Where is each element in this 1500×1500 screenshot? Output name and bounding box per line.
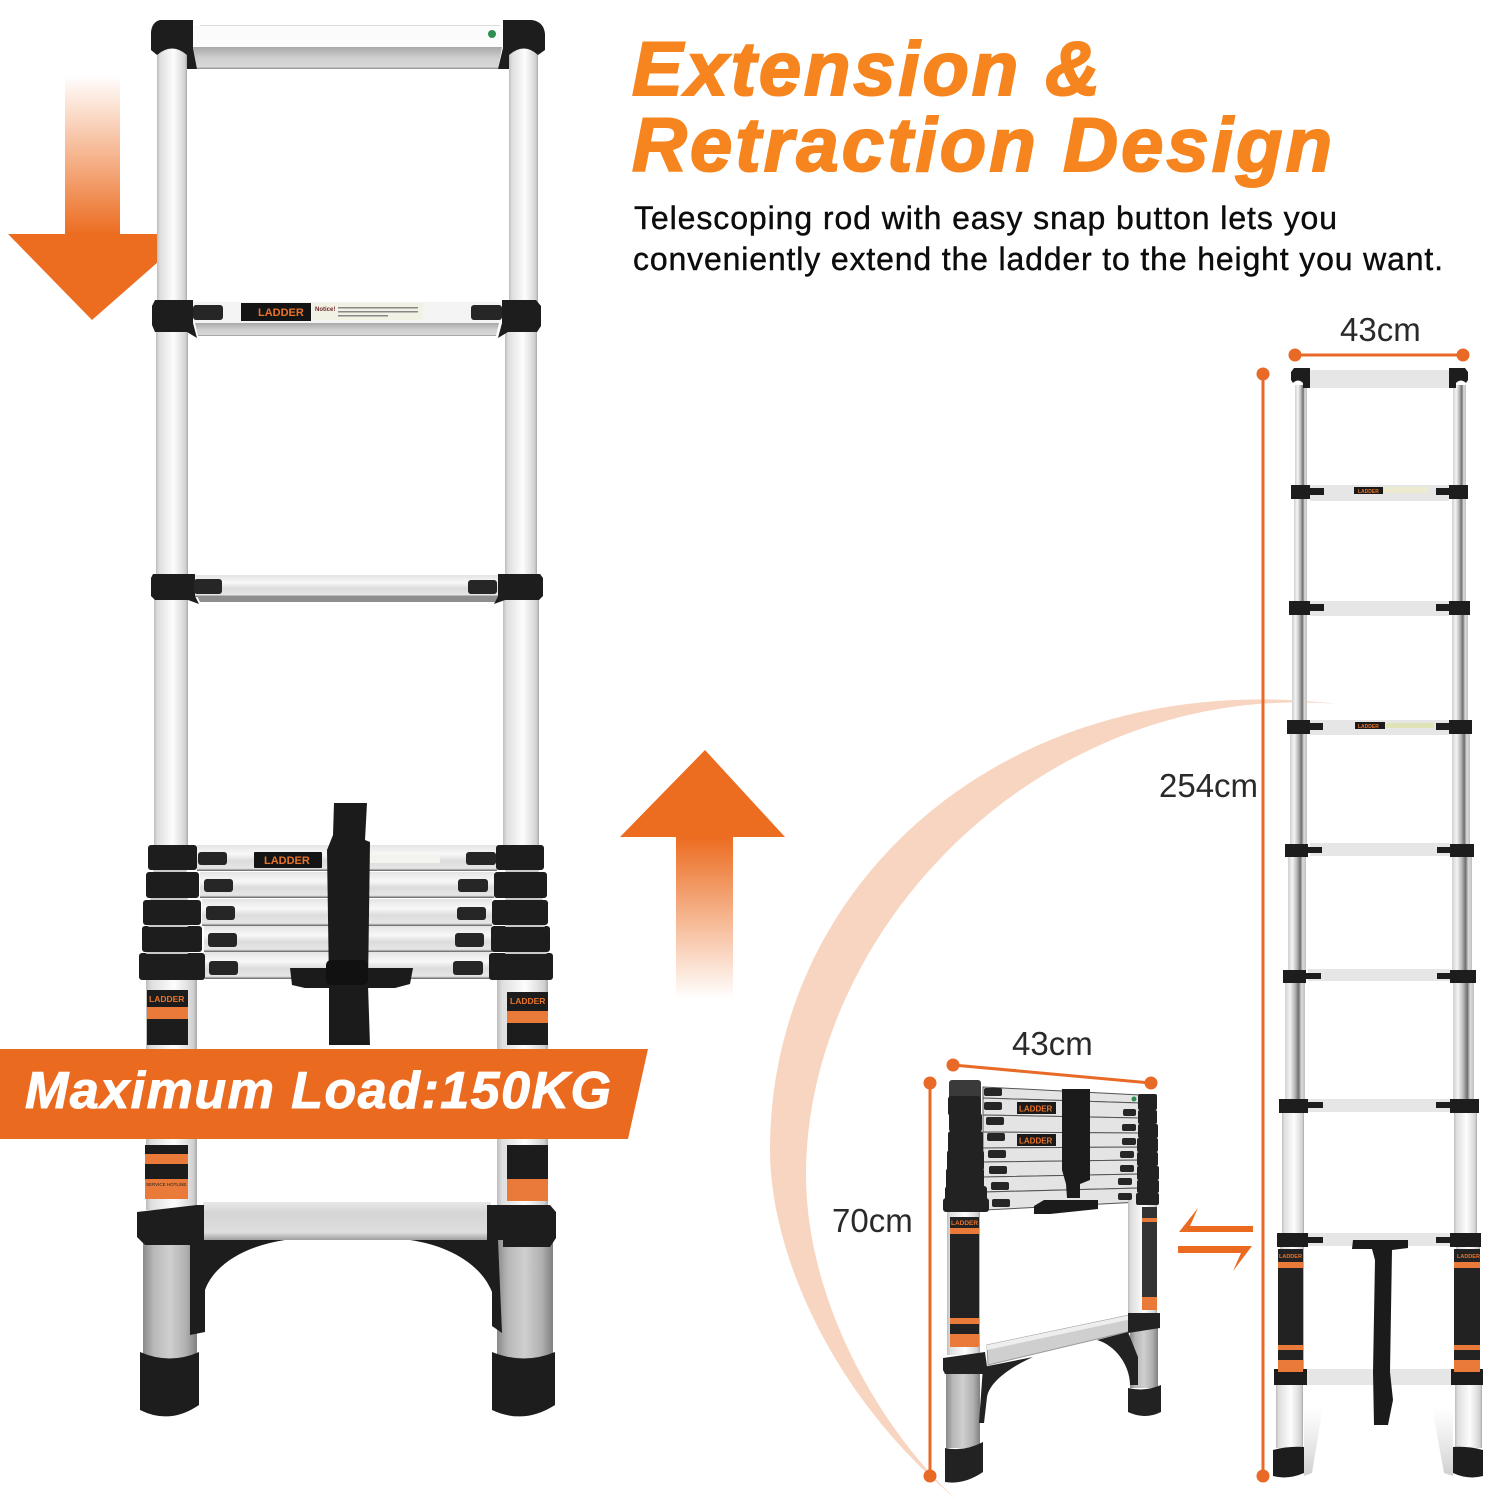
strap and buckle [290,803,413,1045]
extended collars [1273,368,1483,1477]
folded stickers [950,1207,1157,1347]
folded bottom rung [987,1315,1135,1365]
folded ladder labels [1017,1102,1056,1146]
title [632,27,1332,188]
title: Retraction Design [632,103,1332,188]
green indicator [488,30,496,38]
rung label lower: LADDER [264,855,310,867]
description text: conveniently extend the ladder to the height you want. [633,241,1443,277]
extended rung labels: LADDER [1358,489,1379,495]
extended stickers: LADDER [1279,1254,1302,1260]
folded ladder labels: LADDER [1019,1104,1053,1114]
up arrow [620,750,785,999]
folded stickers: LADDER [951,1220,978,1227]
load banner [0,1049,648,1139]
down arrow [8,75,158,320]
description text [633,200,1443,277]
rung label lower [254,852,440,868]
label 254cm: 254cm [1159,767,1258,804]
label 43cm extended: 43cm [1340,311,1421,348]
folded ladder [943,1080,1161,1483]
pale curved motion arc [770,699,1338,1500]
folded green indicator [1132,1096,1136,1102]
folded ladder labels: LADDER [1019,1136,1053,1146]
extended strap [1352,1240,1408,1425]
rung label upper: Notice! [315,307,335,313]
load banner: Maximum Load:150KG [25,1062,611,1120]
title: Extension & [632,27,1100,112]
extended stickers [1278,1249,1480,1372]
folded strap [1034,1089,1098,1214]
main extended ladder [137,20,556,1416]
warning stickers: LADDER [510,996,545,1006]
warning stickers [145,990,548,1201]
main ladder black collars [137,20,556,1416]
extended ladder dimension lines [1258,350,1468,1481]
label 43cm folded: 43cm [1012,1025,1093,1062]
label 70cm: 70cm [832,1202,913,1239]
main ladder rungs [190,25,504,1240]
description text: Telescoping rod with easy snap button lets you [634,200,1337,236]
warning stickers: LADDER [149,994,184,1004]
collar highlights [146,870,547,954]
folded ladder dimension lines [925,1060,1156,1481]
folded collars [943,1080,1161,1483]
main ladder tubes [146,45,548,1210]
warning stickers: SERVICE HOTLINE [146,1182,186,1187]
extended stickers: LADDER [1457,1254,1480,1260]
folded rungs [983,1087,1140,1210]
main ladder snap buttons [193,305,502,975]
folded tubes [947,1200,1157,1355]
rung label upper: LADDER [258,307,304,319]
extended ladder [1273,368,1483,1477]
extended rails [1285,385,1474,1106]
extended rung labels: LADDER [1358,724,1379,730]
leg shadows [1304,1407,1453,1476]
extended rungs [1306,370,1453,1385]
folded snap buttons [984,1088,1136,1207]
rung label upper [241,303,423,321]
transform arrows [1178,1208,1253,1271]
extended rung labels [1354,487,1434,730]
